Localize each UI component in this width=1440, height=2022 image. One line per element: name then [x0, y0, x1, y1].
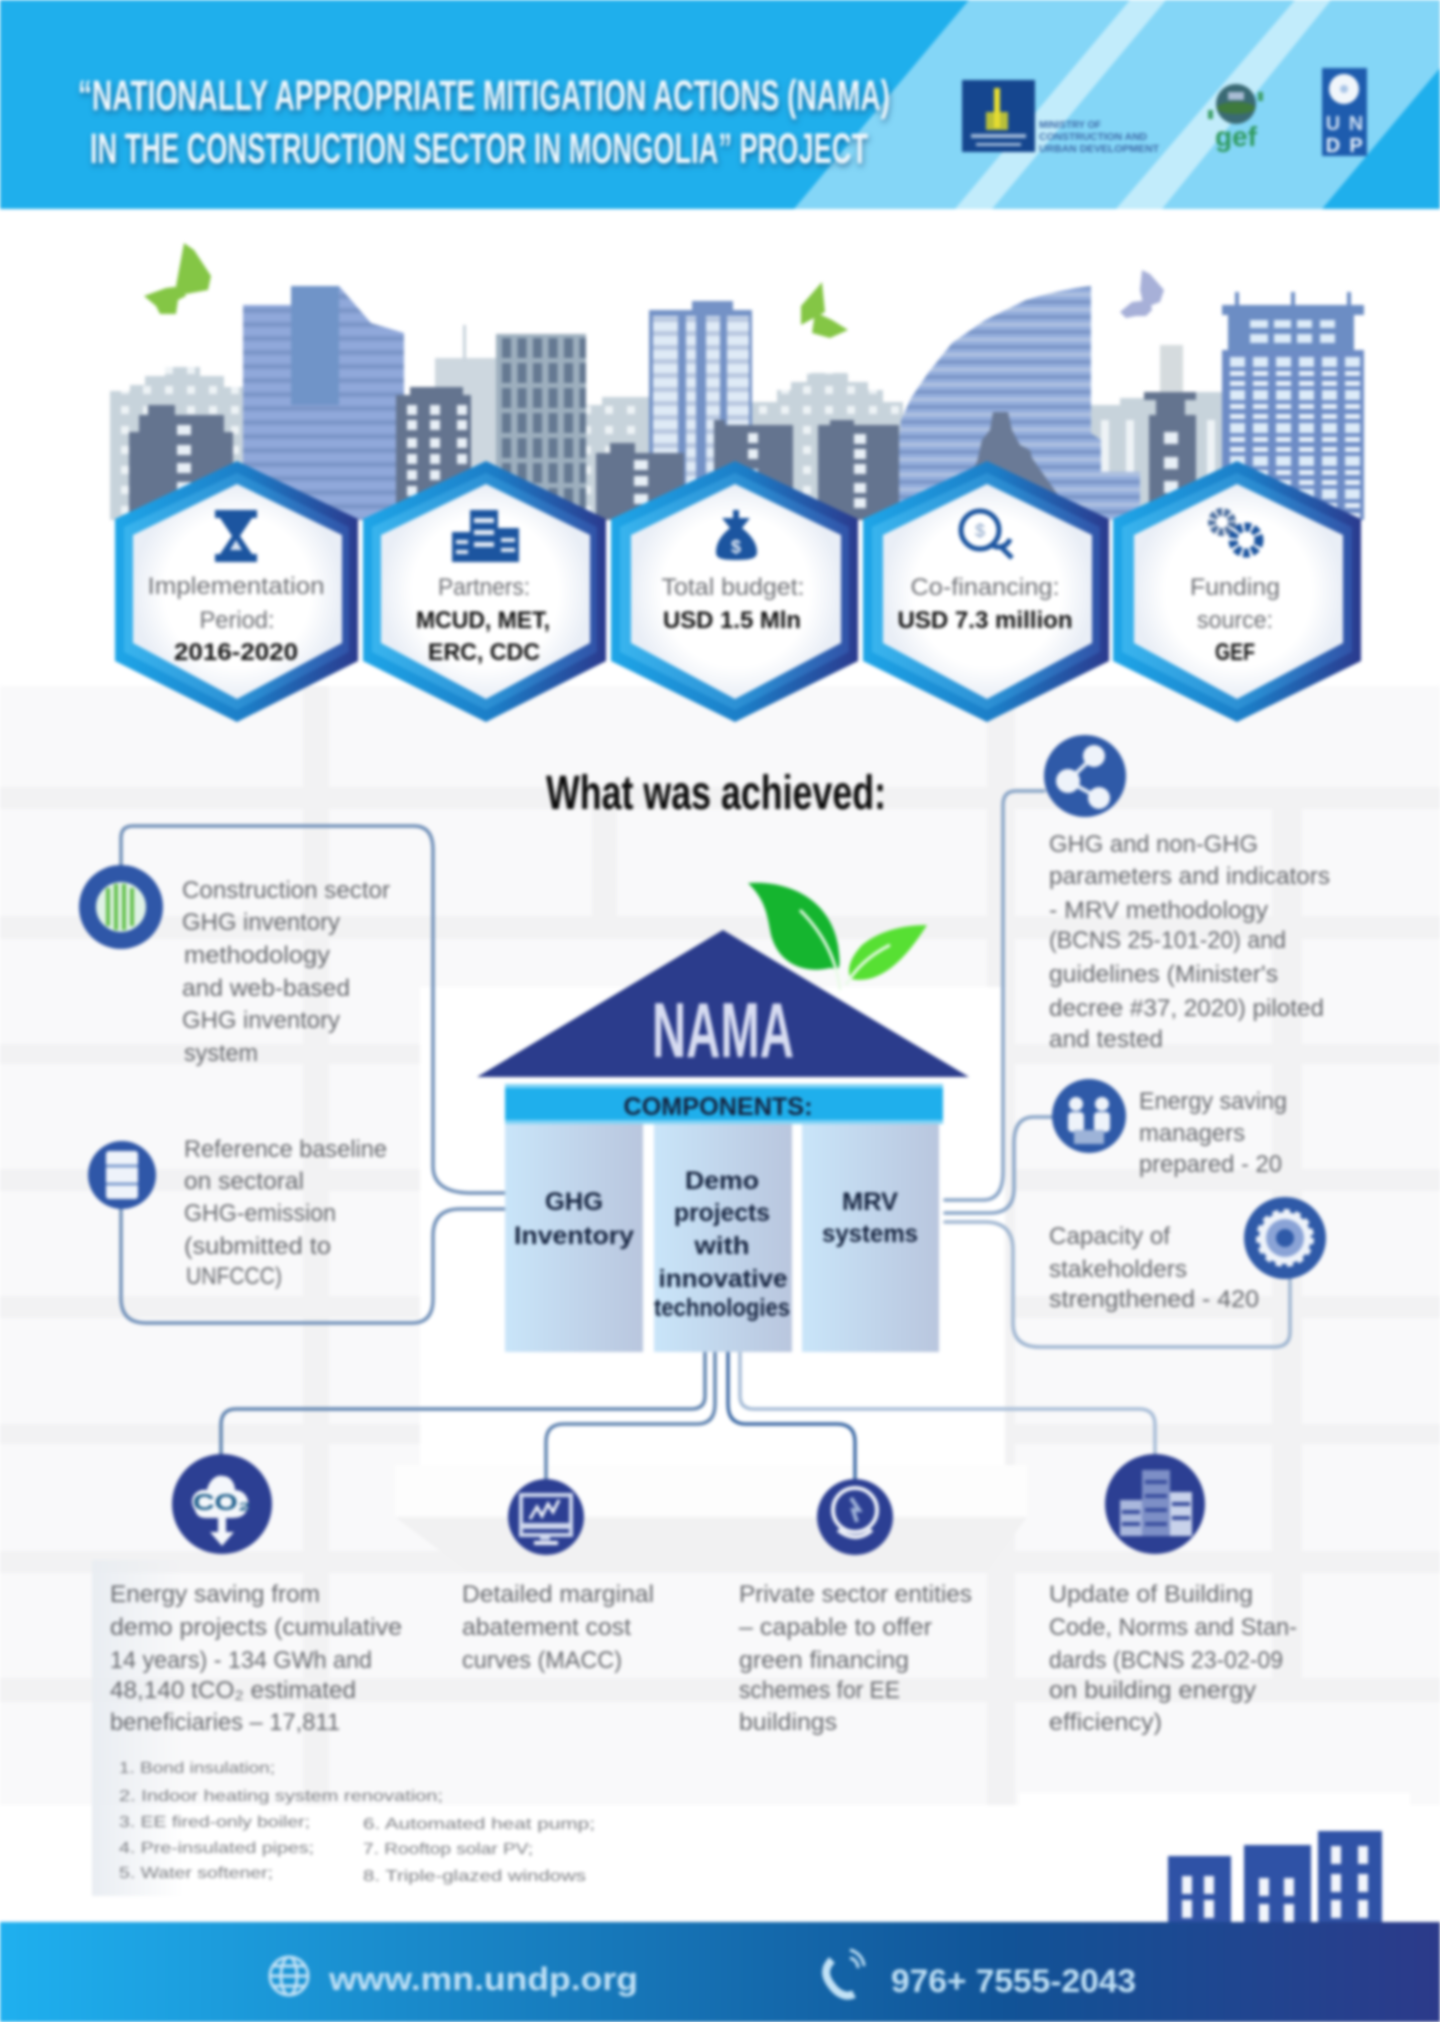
logo: ministry: CONSTRUCTION AND: [1039, 132, 1147, 143]
background map pattern: [0, 686, 1440, 1925]
components bar: [505, 1084, 943, 1124]
text: funding source: Funding: [1190, 574, 1280, 601]
text: MRV methodology: [1049, 831, 1330, 1053]
bottom-right buildings: [1168, 1831, 1382, 1922]
text: building codes: efficiency): [1049, 1709, 1162, 1736]
text: co-financing: [898, 574, 1072, 634]
heading: what was achieved: What was achieved:: [546, 767, 886, 820]
text: implementation period: Implementation: [148, 573, 324, 600]
footnotes list: 8. Triple-glazed windows: [363, 1868, 586, 1885]
icon: hourglass: [215, 510, 257, 562]
building windows: [177, 405, 1178, 508]
text: partners: Partners:: [438, 574, 530, 601]
pillar: demo projects: projects: [674, 1199, 770, 1227]
icon: green butterfly centre: [801, 282, 848, 338]
header band: [0, 0, 1440, 209]
icon: phone: [826, 1950, 864, 1996]
connector lines: [121, 791, 1290, 1480]
icon: globe: [270, 1957, 308, 1995]
icon: money bag: $: [731, 537, 741, 557]
icon: CO2 cloud circle: CO₂: [193, 1489, 251, 1515]
text: MRV methodology: - MRV methodology: [1049, 897, 1268, 924]
text: private sector: buildings: [739, 1709, 837, 1736]
text: reference baseline: [184, 1136, 387, 1290]
logo: undp: D: [1326, 135, 1340, 157]
text: partners: ERC, CDC: [428, 639, 540, 666]
pillar: demo projects: innovative: [658, 1265, 788, 1293]
icon: share circle: [1044, 735, 1126, 817]
text: private sector: [739, 1581, 972, 1736]
logo: ministry: [962, 80, 1159, 155]
icon: CO2 cloud circle: [172, 1454, 272, 1554]
logo: ministry: MINISTRY OF: [1039, 120, 1101, 131]
text: building codes: Update of Building: [1049, 1581, 1253, 1608]
text: implementation period: 2016-2020: [174, 639, 298, 666]
footnotes list: 5. Water softener;: [119, 1865, 273, 1882]
text: capacity strengthened: strengthened - 420: [1049, 1286, 1259, 1313]
footnotes list: 1. Bond insulation;: [119, 1760, 275, 1777]
footnotes list: 7. Rooftop solar PV;: [363, 1841, 533, 1858]
title: IN THE CONSTRUCTION SECTOR IN MONGOLIA” PROJECT: [90, 125, 868, 173]
footnotes list: 6. Automated heat pump;: [363, 1816, 595, 1833]
pillar: demo projects: Demo: [685, 1167, 759, 1195]
text: MRV methodology: decree #37, 2020) piloted: [1049, 995, 1324, 1022]
light blue window tower: [649, 301, 752, 506]
icon: monitor circle: [508, 1479, 584, 1555]
pillar: MRV systems: systems: [822, 1220, 918, 1248]
text: energy saving demo: [110, 1581, 402, 1736]
text: marginal abatement: [462, 1581, 654, 1674]
footnotes list: 2. Indoor heating system renovation;: [119, 1788, 443, 1805]
text: energy saving demo: 14 years) - 134 GWh and: [110, 1647, 372, 1674]
text: funding source: [1190, 574, 1280, 666]
title: [78, 72, 890, 173]
hexagon 1: implementation period: [115, 461, 358, 722]
text: energy saving demo: 48,140 tCO₂ estimated: [110, 1677, 356, 1704]
text: private sector: Private sector entities: [739, 1581, 972, 1608]
logo: gef: [1208, 84, 1263, 152]
text: partners: [416, 574, 550, 666]
text: building codes: [1049, 1581, 1297, 1736]
text: implementation period: Period:: [200, 607, 274, 634]
text: total budget: Total budget:: [662, 574, 804, 601]
text: inventory methodology: [182, 877, 390, 1067]
text: total budget: USD 1.5 Mln: [663, 607, 801, 634]
icon: chat bubbles: $: [975, 521, 985, 541]
text: inventory methodology: and web-based: [182, 975, 350, 1002]
text: energy saving managers: managers: [1139, 1120, 1245, 1147]
logo: undp: U: [1326, 113, 1340, 135]
footnotes list: 4. Pre-insulated pipes;: [119, 1840, 314, 1857]
footnotes list: 3. EE fired-only boiler;: [119, 1814, 310, 1831]
text: MRV methodology: (BCNS 25-101-20) and: [1049, 927, 1286, 954]
text: private sector: schemes for EE: [739, 1677, 900, 1704]
text: MRV methodology: guidelines (Minister's: [1049, 961, 1278, 988]
hexagon 2: partners: [363, 461, 606, 722]
gray grid building: [496, 334, 586, 514]
text: marginal abatement: Detailed marginal: [462, 1581, 654, 1608]
logo: undp: N: [1349, 113, 1363, 135]
components bar: COMPONENTS:: [624, 1093, 812, 1121]
right grid tower: [1222, 292, 1364, 520]
statue silhouette: [960, 412, 1058, 520]
hexagon 5: funding source: [1113, 461, 1361, 722]
icon: chat bubbles: [961, 511, 1012, 558]
text: building codes: on building energy: [1049, 1677, 1256, 1704]
text: private sector: green financing: [739, 1647, 909, 1674]
text: co-financing: Co-financing:: [910, 574, 1060, 601]
pillar: demo projects: technologies: [654, 1294, 790, 1322]
icon: buildings circle: [1105, 1454, 1205, 1554]
pillar: demo projects: with: [693, 1232, 750, 1260]
icon: inventory circle: [79, 865, 163, 949]
text: implementation period: [148, 573, 324, 666]
logo: gef: gef: [1215, 121, 1258, 152]
text: total budget: [662, 574, 804, 634]
footnotes list: [119, 1760, 595, 1885]
text: inventory methodology: methodology: [184, 942, 330, 969]
text: inventory methodology: system: [184, 1040, 258, 1067]
title: “NATIONALLY APPROPRIATE MITIGATION ACTIONS (NAMA): [78, 72, 890, 120]
pillar: MRV systems: MRV: [842, 1188, 898, 1216]
text: private sector: – capable to offer: [739, 1614, 932, 1641]
text: co-financing: USD 7.3 million: [898, 607, 1072, 634]
text: energy saving demo: beneficiaries – 17,811: [110, 1709, 340, 1736]
text: energy saving managers: [1139, 1088, 1287, 1178]
icon: gears: [1212, 512, 1259, 553]
blue striped tower: [243, 286, 404, 520]
logo: ministry: URBAN DEVELOPMENT: [1039, 144, 1159, 155]
city skyline: [110, 286, 1364, 525]
text: energy saving managers: prepared - 20: [1139, 1151, 1282, 1178]
text: reference baseline: on sectoral: [184, 1168, 304, 1195]
text: energy saving demo: demo projects (cumulative: [110, 1614, 402, 1641]
icon: green butterfly left: [144, 243, 211, 314]
hexagon 3: total budget: [611, 461, 858, 722]
dark foreground buildings: [129, 345, 1196, 525]
text: energy saving managers: Energy saving: [1139, 1088, 1287, 1115]
text: capacity strengthened: [1049, 1223, 1259, 1313]
house roof: [477, 930, 969, 1077]
text: MRV methodology: and tested: [1049, 1026, 1163, 1053]
text: inventory methodology: GHG inventory: [182, 1007, 340, 1034]
text: partners: MCUD, MET,: [416, 607, 550, 634]
icon: office buildings: [452, 510, 519, 562]
text: capacity strengthened: Capacity of: [1049, 1223, 1170, 1250]
text: building codes: dards (BCNS 23-02-09: [1049, 1647, 1283, 1674]
text: MRV methodology: GHG and non-GHG: [1049, 831, 1258, 858]
hexagon 4: co-financing: [863, 461, 1109, 722]
icon: lightbulb hand circle: [817, 1479, 893, 1555]
text: marginal abatement: abatement cost: [462, 1614, 631, 1641]
pillar: GHG inventory: GHG: [545, 1188, 603, 1216]
text: capacity strengthened: stakeholders: [1049, 1256, 1187, 1283]
footer band: [0, 1922, 1440, 2022]
icon: baseline circle: [88, 1141, 156, 1209]
text: funding source: source:: [1197, 607, 1273, 634]
back light-gray buildings: [110, 325, 1222, 520]
icon: lilac butterfly: [1120, 270, 1164, 318]
text: reference baseline: GHG-emission: [184, 1200, 336, 1227]
icon: people circle: [1052, 1079, 1126, 1153]
text: reference baseline: Reference baseline: [184, 1136, 387, 1163]
text: phone number: 976+ 7555-2043: [891, 1963, 1136, 1999]
text: marginal abatement: curves (MACC): [462, 1647, 622, 1674]
text: inventory methodology: GHG inventory: [182, 909, 340, 936]
text: reference baseline: UNFCCC): [186, 1263, 282, 1290]
text: inventory methodology: Construction sector: [182, 877, 390, 904]
icon: gear circle: [1244, 1197, 1326, 1279]
text: NAMA: NAMA: [652, 986, 794, 1074]
pillar: GHG inventory: Inventory: [514, 1222, 634, 1250]
logo: undp: [1322, 68, 1367, 157]
pillar: GHG inventory: [505, 1124, 643, 1352]
curved blue tower: [897, 286, 1140, 520]
pillar: demo projects: [654, 1124, 792, 1352]
icon: leaves: [748, 883, 927, 990]
text: reference baseline: (submitted to: [184, 1233, 331, 1260]
text: funding source: GEF: [1215, 639, 1255, 666]
text: website: www.mn.undp.org: [328, 1961, 638, 1997]
logo: undp: P: [1349, 135, 1363, 157]
text: MRV methodology: parameters and indicators: [1049, 863, 1330, 890]
text: energy saving demo: Energy saving from: [110, 1581, 320, 1608]
text: building codes: Code, Norms and Stan-: [1049, 1614, 1297, 1641]
pillar: MRV systems: [802, 1124, 939, 1352]
icon: money bag: [716, 510, 757, 560]
